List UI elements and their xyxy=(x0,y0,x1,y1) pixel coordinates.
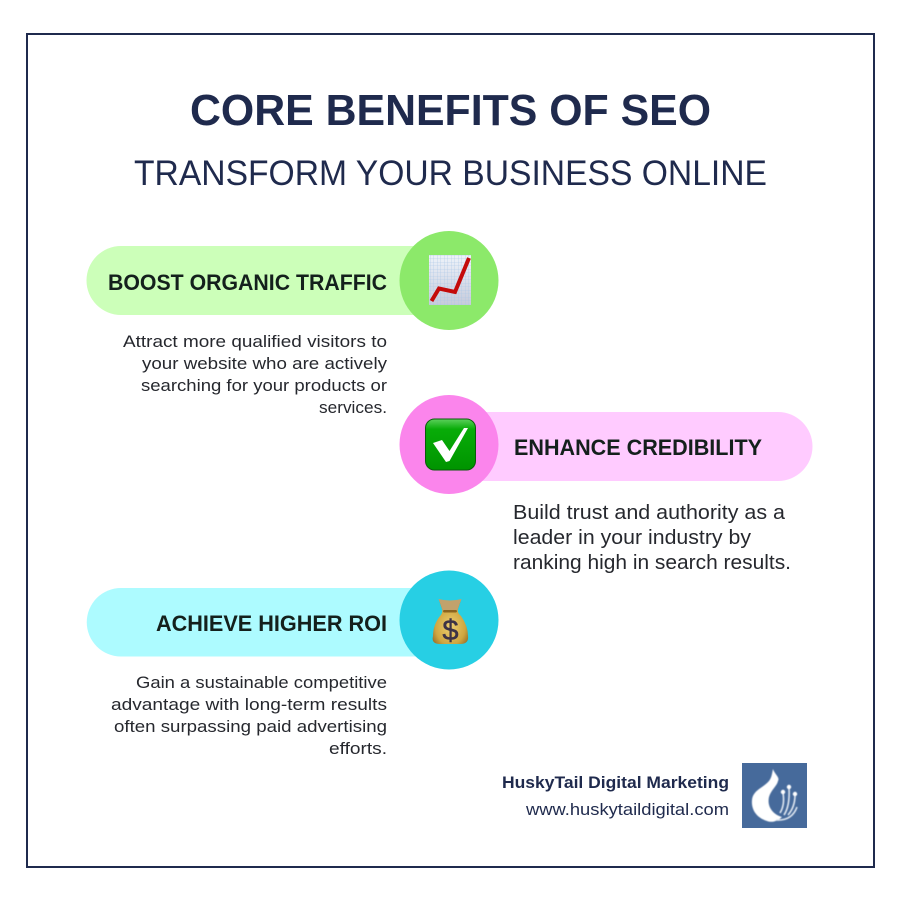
icon: rising chart xyxy=(429,255,471,305)
heading: enhance credibility: ENHANCE CREDIBILITY xyxy=(514,435,762,460)
icon: money bag: $ xyxy=(442,615,459,647)
description: roi: efforts. xyxy=(329,739,387,758)
description: traffic xyxy=(123,332,388,417)
subtitle: TRANSFORM YOUR BUSINESS ONLINE xyxy=(134,154,767,193)
logo xyxy=(742,763,807,828)
heading pill: roi xyxy=(87,588,440,656)
description: roi: advantage with long-term results xyxy=(111,695,387,714)
heading: boost organic traffic: BOOST ORGANIC TRAFFIC xyxy=(108,270,387,295)
description: traffic: Attract more qualified visitors to xyxy=(123,332,387,351)
description: roi: often surpassing paid advertising xyxy=(114,717,387,736)
panel: enhance credibility xyxy=(400,395,813,574)
heading pill: traffic xyxy=(87,246,440,315)
heading pill: credibility xyxy=(460,412,813,481)
description: roi xyxy=(111,673,387,758)
icon: money bag xyxy=(433,599,468,647)
description: credibility: Build trust and authority as a xyxy=(513,502,786,524)
website url: www.huskytaildigital.com xyxy=(525,800,729,819)
description: roi: Gain a sustainable competitive xyxy=(136,673,387,692)
icon circle: traffic xyxy=(400,231,498,330)
description: traffic: your website who are actively xyxy=(142,354,388,373)
icon circle: credibility xyxy=(400,395,498,494)
panel: achieve higher roi xyxy=(87,570,498,758)
footer: brand xyxy=(502,763,807,828)
icon circle: roi xyxy=(400,570,498,670)
description: traffic: searching for your products or xyxy=(141,376,387,395)
description: credibility xyxy=(513,502,791,574)
brand name: HuskyTail Digital Marketing xyxy=(502,773,729,792)
heading: achieve higher roi: ACHIEVE HIGHER ROI xyxy=(156,611,387,636)
icon: green check mark xyxy=(426,419,476,470)
description: credibility: leader in your industry by xyxy=(513,527,751,549)
title: CORE BENEFITS OF SEO xyxy=(190,86,711,135)
description: credibility: ranking high in search results. xyxy=(513,552,791,574)
description: traffic: services. xyxy=(319,398,387,417)
panel: boost organic traffic xyxy=(87,231,499,417)
